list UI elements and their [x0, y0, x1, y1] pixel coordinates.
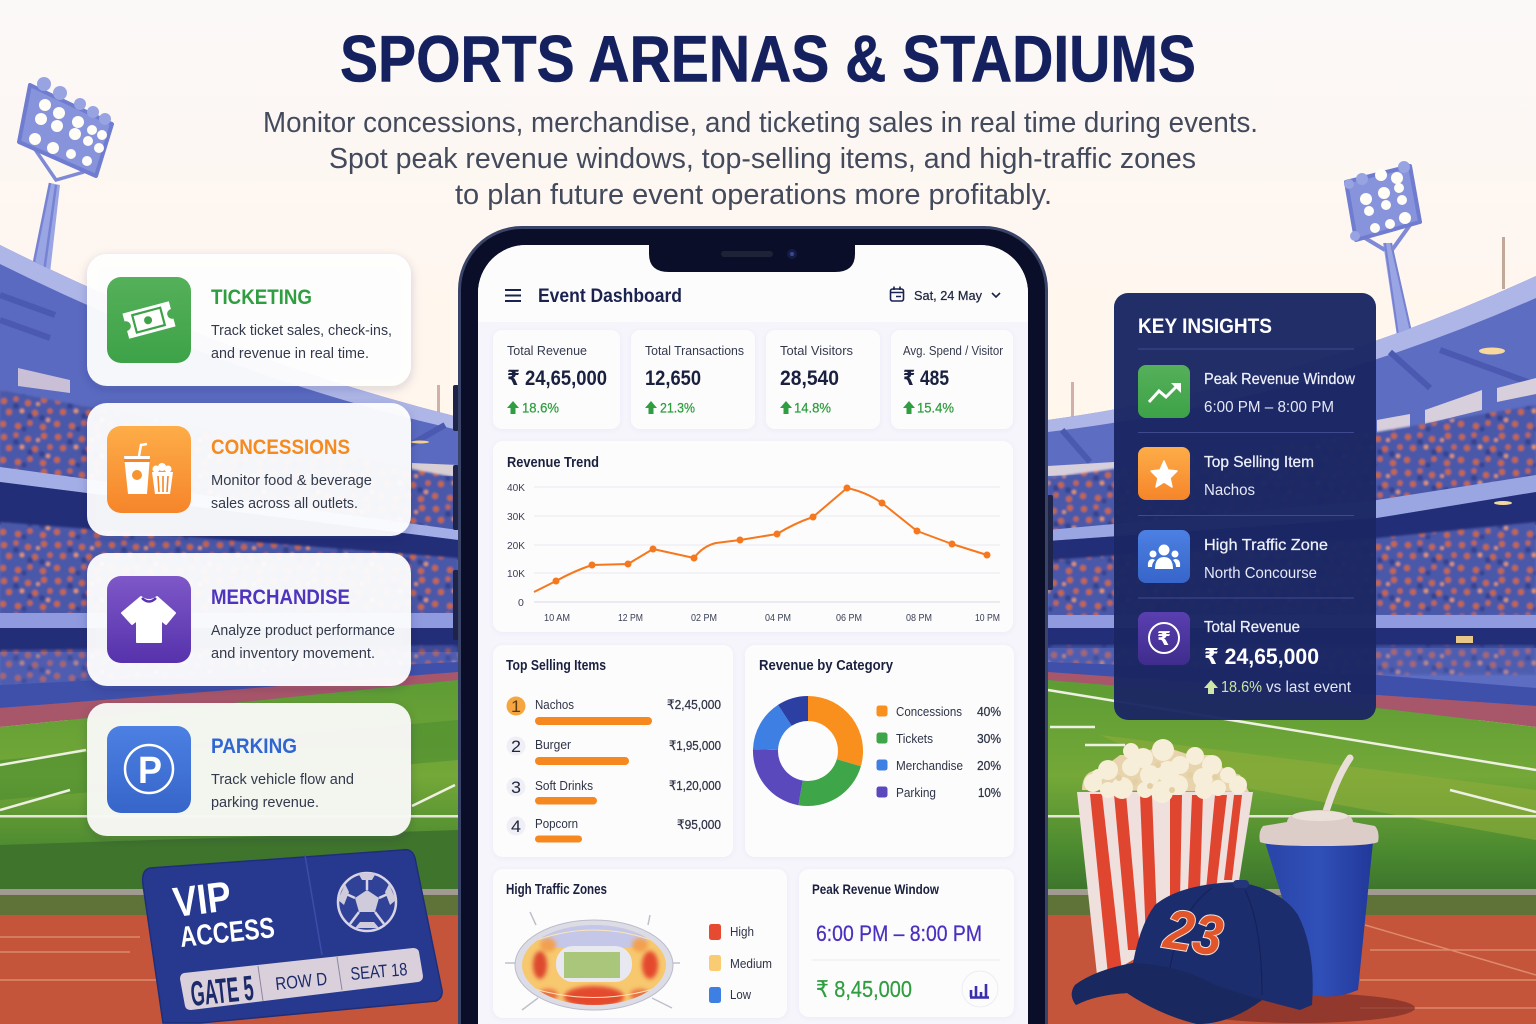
- left floodlight: [19, 77, 112, 273]
- chart: revenue trend: [493, 441, 1013, 632]
- chart: revenue trend: 10K: [507, 568, 525, 580]
- chart: revenue trend: 06 PM: [836, 612, 862, 624]
- row: burger: Burger: [535, 737, 572, 752]
- phone header: Sat, 24 May: [914, 288, 982, 303]
- icon: drink and popcorn: [107, 426, 191, 513]
- right grandstand: [1048, 276, 1536, 720]
- row: nachos: 1: [511, 697, 521, 716]
- panel: top selling items: [493, 645, 733, 857]
- KPI: total visitors: Total Visitors: [780, 343, 853, 358]
- panel: revenue by category: [745, 645, 1014, 857]
- legend: [876, 705, 1001, 800]
- heading: key insights: KEY INSIGHTS: [1138, 315, 1272, 338]
- legend: [709, 924, 772, 1003]
- KPI: average spend: [891, 330, 1013, 429]
- revenue line: [534, 484, 990, 592]
- panel: merchandise: MERCHANDISE: [211, 586, 350, 609]
- baseball cap: [1072, 880, 1313, 1024]
- row: soft drinks: ₹1,20,000: [669, 778, 721, 793]
- row: burger: 2: [511, 737, 521, 756]
- legend: 40%: [977, 705, 1001, 719]
- insight: total revenue: ₹ 24,65,000: [1204, 644, 1319, 669]
- panel: concessions: [87, 403, 411, 536]
- KPI: total visitors: [766, 330, 880, 429]
- subtitle: [263, 107, 1258, 211]
- panel: merchandise: and inventory movement.: [211, 645, 375, 662]
- legend: Concessions: [896, 705, 962, 719]
- icon: t-shirt: [107, 576, 191, 663]
- insight: total revenue: Total Revenue: [1204, 619, 1300, 636]
- row: popcorn: [506, 816, 721, 842]
- row: burger: [506, 736, 721, 765]
- soft drink cup: [1259, 758, 1379, 997]
- panel: high traffic zones: High Traffic Zones: [506, 882, 607, 898]
- row: popcorn: Popcorn: [535, 816, 578, 831]
- KPI: total revenue: 18.6%: [522, 400, 559, 416]
- chart: revenue trend: 10 PM: [975, 612, 1000, 624]
- legend: 30%: [977, 732, 1001, 746]
- panel: merchandise: [87, 553, 411, 686]
- panel: peak revenue window: ₹ 8,45,000: [816, 976, 912, 1002]
- insight: peak revenue window: Peak Revenue Window: [1204, 371, 1355, 388]
- VIP ticket: ACCESS: [178, 912, 276, 954]
- left grandstand: [0, 245, 458, 720]
- row: soft drinks: Soft Drinks: [535, 778, 593, 793]
- panel: concessions: CONCESSIONS: [211, 436, 350, 459]
- panel: concessions: sales across all outlets.: [211, 495, 358, 512]
- notch: [649, 245, 855, 272]
- panel: parking: PARKING: [211, 735, 297, 758]
- insight: peak revenue window: [1138, 365, 1355, 418]
- VIP ticket: SEAT 18: [350, 959, 408, 984]
- panel: key insights: [1114, 293, 1376, 720]
- legend: 10%: [978, 786, 1001, 800]
- row: nachos: [506, 696, 721, 725]
- subtitle: Monitor concessions, merchandise, and ticketing sales in real time during events.: [263, 107, 1258, 139]
- row: popcorn: ₹95,000: [677, 817, 721, 832]
- insight: total revenue: 18.6%: [1221, 679, 1262, 696]
- baseball cap: 23: [1159, 896, 1227, 968]
- insight: peak revenue window: 6:00 PM – 8:00 PM: [1204, 399, 1334, 416]
- VIP ticket: ROW D: [274, 969, 328, 994]
- row: nachos: ₹2,45,000: [667, 697, 721, 712]
- panel: peak revenue window: Peak Revenue Window: [812, 881, 939, 897]
- panel: merchandise: Analyze product performance: [211, 622, 395, 639]
- KPI: total revenue: Total Revenue: [507, 343, 587, 358]
- phone screen: [478, 245, 1028, 1024]
- subtitle: Spot peak revenue windows, top-selling items, and high-traffic zones: [329, 143, 1196, 175]
- KPI: total transactions: Total Transactions: [645, 343, 744, 358]
- KPI: average spend: ₹ 485: [903, 367, 949, 390]
- panel: ticketing: [87, 254, 411, 386]
- KPI: total transactions: 21.3%: [660, 400, 695, 416]
- chart: revenue trend: 12 PM: [618, 612, 643, 624]
- KPI: total visitors: 28,540: [780, 367, 839, 390]
- KPI: total transactions: 12,650: [645, 367, 701, 390]
- legend: Merchandise: [896, 759, 963, 773]
- legend: Low: [730, 988, 752, 1002]
- chart: revenue trend: 20K: [507, 540, 525, 552]
- KPI: average spend: 15.4%: [917, 400, 954, 416]
- panel: top selling items: Top Selling Items: [506, 658, 606, 674]
- legend: 20%: [977, 759, 1001, 773]
- KPI: total transactions: [631, 330, 755, 429]
- panel: concessions: Monitor food & beverage: [211, 472, 372, 489]
- panel: ticketing: TICKETING: [211, 286, 312, 309]
- stadium heat map: [505, 912, 680, 1010]
- legend: Parking: [896, 786, 936, 800]
- chart: revenue trend: 08 PM: [906, 612, 932, 624]
- icon: parking: P: [138, 750, 162, 792]
- VIP ticket: VIP: [170, 872, 234, 926]
- insight: total revenue: [1138, 612, 1352, 696]
- KPI: total revenue: ₹ 24,65,000: [507, 367, 607, 390]
- panel: parking: Track vehicle flow and: [211, 771, 354, 788]
- phone header: [505, 286, 1000, 307]
- insight: top selling item: Top Selling Item: [1204, 454, 1314, 471]
- insight: top selling item: Nachos: [1204, 482, 1255, 499]
- insight: high traffic zone: [1138, 530, 1328, 583]
- KPI: average spend: Avg. Spend / Visitor: [903, 343, 1004, 358]
- KPI: total revenue: [493, 330, 620, 429]
- insight: high traffic zone: High Traffic Zone: [1204, 537, 1328, 554]
- popcorn box: [1077, 739, 1253, 975]
- panel: high traffic zones: [504, 883, 776, 1018]
- panel: ticketing: and revenue in real time.: [211, 345, 369, 362]
- chart: revenue trend: Revenue Trend: [507, 454, 599, 471]
- row: nachos: Nachos: [535, 697, 574, 712]
- chart: revenue trend: 0: [518, 597, 524, 609]
- panel: ticketing: Track ticket sales, check-ins,: [211, 322, 392, 339]
- row: burger: ₹1,95,000: [669, 738, 721, 753]
- subtitle: to plan future event operations more profitably.: [455, 179, 1052, 211]
- chart: revenue trend: 02 PM: [691, 612, 717, 624]
- panel: peak revenue window: 6:00 PM – 8:00 PM: [816, 921, 982, 946]
- insight: high traffic zone: North Concourse: [1204, 565, 1317, 582]
- legend: High: [730, 925, 754, 939]
- VIP ticket: [143, 850, 442, 1023]
- pitch: [0, 672, 1536, 1024]
- insight: total revenue: vs last event: [1266, 679, 1352, 696]
- chart: donut: [753, 696, 863, 806]
- panel: parking: [87, 703, 411, 836]
- insight: total revenue: ₹: [1157, 629, 1171, 650]
- panel: parking: parking revenue.: [211, 794, 319, 811]
- legend: Tickets: [896, 732, 933, 746]
- chart: revenue trend: 10 AM: [544, 612, 570, 624]
- icon: soccer ball: [337, 872, 397, 932]
- chart: revenue trend: 40K: [507, 482, 525, 494]
- insight: top selling item: [1138, 447, 1314, 500]
- VIP ticket: GATE 5: [189, 969, 255, 1014]
- row: popcorn: 4: [511, 817, 521, 836]
- title: SPORTS ARENAS & STADIUMS: [340, 22, 1196, 96]
- right floodlight: [437, 161, 1505, 420]
- KPI: total visitors: 14.8%: [794, 400, 831, 416]
- panel: revenue by category: Revenue by Category: [759, 658, 893, 674]
- chart: revenue trend: 30K: [507, 511, 525, 523]
- chart: revenue trend: 04 PM: [765, 612, 791, 624]
- phone header: Event Dashboard: [538, 286, 682, 307]
- icon: ticket: [107, 277, 191, 363]
- legend: Medium: [730, 957, 772, 971]
- icon: parking: [107, 726, 191, 813]
- panel: peak revenue window: [799, 869, 1014, 1017]
- phone: [453, 226, 1053, 1024]
- row: soft drinks: 3: [511, 778, 521, 797]
- icon: bar chart: [962, 971, 998, 1007]
- row: soft drinks: [506, 778, 721, 804]
